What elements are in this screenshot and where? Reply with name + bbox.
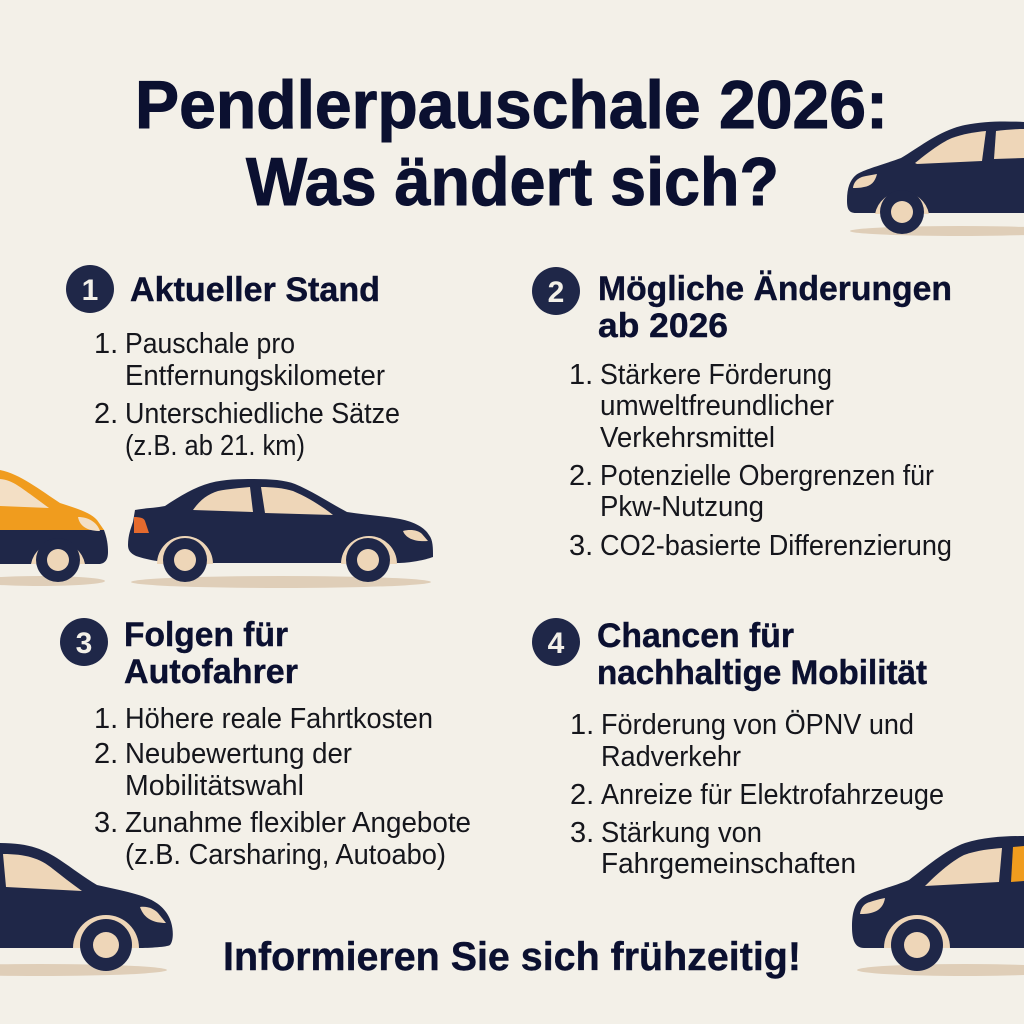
list: mögliche Änderungen: 3.: [569, 530, 593, 562]
list: Chancen für nachhaltige Mobilität: Radverkehr: [601, 741, 741, 773]
list: mögliche Änderungen: Stärkere Förderung: [600, 359, 832, 391]
list: mögliche Änderungen: umweltfreundlicher: [600, 390, 834, 422]
heading: Folgen für Autofahrer: [124, 616, 298, 691]
list: Chancen für nachhaltige Mobilität: Förderung von ÖPNV und: [601, 709, 914, 741]
list: mögliche Änderungen: Potenzielle Obergrenzen für: [600, 460, 934, 492]
footer call to action: Informieren Sie sich frühzeitig!: [223, 935, 801, 979]
list: Folgen für Autofahrer: [94, 703, 471, 871]
icon: number 1: 1: [82, 274, 98, 307]
list: mögliche Änderungen: Pkw-Nutzung: [600, 491, 764, 523]
icon: car top right: [847, 121, 1024, 236]
panel: Folgen für Autofahrer: [60, 616, 471, 871]
list: mögliche Änderungen: [569, 359, 952, 562]
list: Folgen für Autofahrer: Höhere reale Fahrtkosten: [125, 703, 433, 735]
icon: number 3: 3: [76, 627, 92, 660]
heading: Mögliche Änderungen: ab 2026: [598, 307, 728, 345]
icon: number 4: [532, 618, 580, 666]
list: mögliche Änderungen: CO2-basierte Differenzierung: [600, 530, 952, 562]
icon: number 2: [532, 267, 580, 315]
list: Chancen für nachhaltige Mobilität: Fahrgemeinschaften: [601, 848, 856, 880]
list: aktueller Stand: (z.B. ab 21. km): [125, 430, 305, 462]
title: Pendlerpauschale 2026:: [135, 67, 888, 143]
list: aktueller Stand: Pauschale pro: [125, 328, 295, 360]
list: aktueller Stand: 1.: [94, 328, 118, 360]
heading: Folgen für Autofahrer: Autofahrer: [124, 653, 298, 691]
heading: Chancen für nachhaltige Mobilität: nachhaltige Mobilität: [597, 654, 927, 692]
icon: number 1: [66, 265, 114, 313]
heading: Chancen für nachhaltige Mobilität: [597, 617, 927, 692]
list: mögliche Änderungen: 1.: [569, 359, 593, 391]
list: aktueller Stand: 2.: [94, 398, 118, 430]
list: Folgen für Autofahrer: Mobilitätswahl: [125, 770, 304, 802]
list: Chancen für nachhaltige Mobilität: 3.: [570, 817, 594, 849]
heading: Folgen für Autofahrer: Folgen für: [124, 616, 288, 654]
list: Folgen für Autofahrer: 2.: [94, 738, 118, 770]
panel: Chancen für nachhaltige Mobilität: [532, 617, 944, 880]
list: Folgen für Autofahrer: 3.: [94, 807, 118, 839]
list: Folgen für Autofahrer: (z.B. Carsharing, Autoabo): [125, 839, 446, 871]
list: Chancen für nachhaltige Mobilität: Stärkung von: [601, 817, 762, 849]
list: Chancen für nachhaltige Mobilität: 2.: [570, 779, 594, 811]
icon: number 2: 2: [548, 276, 564, 309]
list: aktueller Stand: [94, 328, 400, 462]
icon: car bottom right: [852, 836, 1024, 976]
list: Chancen für nachhaltige Mobilität: [570, 709, 944, 880]
heading: Chancen für nachhaltige Mobilität: Chancen für: [597, 617, 794, 655]
list: aktueller Stand: Entfernungskilometer: [125, 360, 385, 392]
title: [135, 67, 888, 220]
list: mögliche Änderungen: Verkehrsmittel: [600, 422, 775, 454]
icon: number 4: 4: [548, 627, 565, 660]
list: Folgen für Autofahrer: Neubewertung der: [125, 738, 352, 770]
list: mögliche Änderungen: 2.: [569, 460, 593, 492]
list: Chancen für nachhaltige Mobilität: 1.: [570, 709, 594, 741]
heading: Mögliche Änderungen: Mögliche Änderungen: [598, 270, 952, 308]
icon: number 3: [60, 618, 108, 666]
list: Chancen für nachhaltige Mobilität: Anreize für Elektrofahrzeuge: [601, 779, 944, 811]
icon: orange car left: [0, 470, 108, 586]
panel: aktueller Stand: [66, 265, 400, 462]
title: Was ändert sich?: [246, 144, 779, 220]
list: Folgen für Autofahrer: 1.: [94, 703, 118, 735]
list: aktueller Stand: Unterschiedliche Sätze: [125, 398, 400, 430]
heading: Aktueller Stand: Aktueller Stand: [130, 271, 380, 309]
icon: car bottom left: [0, 843, 173, 976]
icon: navy car centre: [128, 479, 433, 588]
list: Folgen für Autofahrer: Zunahme flexibler Angebote: [125, 807, 471, 839]
heading: Mögliche Änderungen: [598, 270, 952, 345]
panel: mögliche Änderungen: [532, 267, 952, 562]
